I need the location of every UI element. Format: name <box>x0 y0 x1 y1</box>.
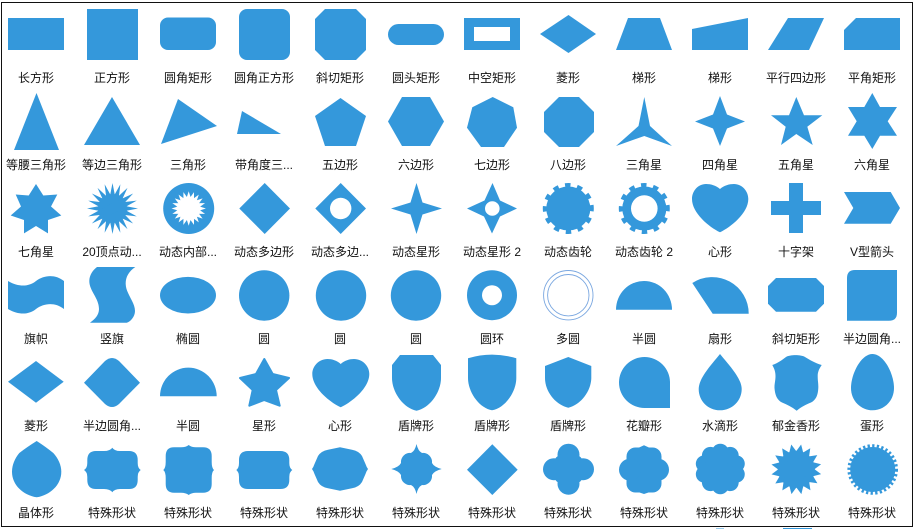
shape: V型箭头 <box>844 192 900 259</box>
shape: 特殊形状 7 <box>543 444 594 520</box>
shape: 平行四边形: 平行四边形 <box>766 71 826 85</box>
shape: 六边形: 六边形 <box>398 158 434 172</box>
shape: 花瓣形 <box>619 357 670 433</box>
shape: 盾牌形 3 <box>545 357 591 433</box>
shape: 菱形 2: 菱形 <box>24 419 48 433</box>
shape: 20顶点动态星形: 20顶点动... <box>82 245 142 259</box>
shape: 动态多边形 <box>234 183 294 259</box>
shape: 动态齿轮 2 <box>615 186 673 259</box>
shape: 盾牌形 2: 盾牌形 <box>474 419 510 433</box>
shape: 椭圆: 椭圆 <box>176 331 200 346</box>
shape: 特殊形状 8 <box>619 445 669 520</box>
shape: 动态星形 2 <box>463 183 521 259</box>
shape: 水滴形 <box>699 354 742 433</box>
shape: 斜切矩形 2: 斜切矩形 <box>772 332 820 346</box>
shape: 扇形 <box>692 277 749 346</box>
shape: 平行四边形 <box>766 18 826 85</box>
shape: 半边圆角菱形 <box>83 358 141 433</box>
shape: 动态内部星形: 动态内部... <box>159 244 217 259</box>
shape: 特殊形状 1 <box>84 448 141 520</box>
shape: 圆 2: 圆 <box>334 332 346 346</box>
shape: 八边形: 八边形 <box>550 158 586 172</box>
shape: 等边三角形: 等边三角形 <box>82 158 142 172</box>
shape: 半圆: 半圆 <box>632 332 656 346</box>
shape: 中空矩形: 中空矩形 <box>468 70 516 85</box>
shape: 圆 1: 圆 <box>258 332 270 346</box>
shape: 盾牌形 1 <box>392 355 441 433</box>
shape: 椭圆 <box>160 277 216 346</box>
shape: 多圆 <box>544 270 593 346</box>
shape: 梯形 2: 梯形 <box>708 71 732 85</box>
shape: 竖旗 <box>89 267 135 346</box>
shape: 等腰三角形: 等腰三角形 <box>6 158 66 172</box>
shape: 特殊形状 4 <box>312 447 368 520</box>
shape: 半边圆角矩形: 半边圆角... <box>843 332 901 346</box>
shape: 八边形 <box>544 97 594 172</box>
shape: 特殊形状 2 <box>163 445 214 520</box>
shape: 十字架 <box>771 183 821 259</box>
shape: 斜切矩形: 斜切矩形 <box>316 71 364 85</box>
shape: 动态星形: 动态星形 <box>392 245 440 259</box>
shape: 斜切矩形 2 <box>768 278 824 346</box>
shape: 动态星形 <box>391 183 442 259</box>
shape: 五角星 <box>771 97 822 172</box>
shape: 三角形: 三角形 <box>170 158 206 172</box>
shape: 半边圆角矩形 <box>843 270 901 346</box>
shape: 七边形 <box>467 97 517 172</box>
shape: 特殊形状 9: 特殊形状 <box>696 505 744 520</box>
shape: 圆 3 <box>391 270 441 346</box>
shape: 正方形: 正方形 <box>94 70 130 85</box>
shape: 梯形 <box>616 18 672 85</box>
shape: 特殊形状 3 <box>236 451 292 520</box>
shape: 三角形 <box>161 99 217 172</box>
shape: 蛋形: 蛋形 <box>860 419 884 433</box>
shape: 郁金香形 <box>772 355 822 433</box>
shape: 圆头矩形 <box>388 24 444 85</box>
shape: 斜切矩形 <box>315 9 366 85</box>
shape: 圆环: 圆环 <box>480 332 504 346</box>
shape: 动态多边形 2 <box>311 183 369 259</box>
shape: 星形: 星形 <box>252 419 276 433</box>
shape: 盾牌形 3: 盾牌形 <box>550 419 586 433</box>
shape: 圆角矩形 <box>160 18 216 85</box>
shape: 水滴形: 水滴形 <box>702 418 738 433</box>
shape: 五边形 <box>315 98 366 172</box>
shape: 圆 2 <box>316 270 366 346</box>
shape: 五角星: 五角星 <box>778 158 814 172</box>
shape: 郁金香形: 郁金香形 <box>772 418 820 433</box>
shape: 盾牌形 1: 盾牌形 <box>398 419 434 433</box>
shape: 特殊形状 2: 特殊形状 <box>164 505 212 520</box>
shape: 动态内部星形 <box>159 183 217 259</box>
shape: 等边三角形 <box>82 97 142 172</box>
shape: 圆角正方形: 圆角正方形 <box>234 70 294 85</box>
shape: 正方形 <box>87 9 138 85</box>
shape: 圆角矩形: 圆角矩形 <box>164 71 212 85</box>
shape: 晶体形: 晶体形 <box>18 506 54 520</box>
shape: 动态齿轮 2: 动态齿轮 2 <box>615 245 673 259</box>
shape: 四角星 <box>695 96 745 172</box>
shape: 半圆 2 <box>160 368 217 433</box>
shape: 旗帜: 旗帜 <box>24 331 48 346</box>
shape: 半边圆角菱形: 半边圆角... <box>83 419 141 433</box>
shape: 动态星形 2: 动态星形 2 <box>463 245 521 259</box>
shape: 五边形: 五边形 <box>322 158 358 172</box>
shape: 心形 2 <box>312 359 369 433</box>
shape: 特殊形状 9 <box>694 444 747 520</box>
shape: 半圆 2: 半圆 <box>176 419 200 433</box>
shape: 动态多边形 2: 动态多边... <box>311 245 369 259</box>
shape: 四角星: 四角星 <box>702 158 738 172</box>
shape: 特殊形状 11 <box>848 446 896 520</box>
shape: 七边形: 七边形 <box>474 158 510 172</box>
shape: 20顶点动态星形 <box>82 183 142 259</box>
shape: 平角矩形: 平角矩形 <box>848 71 896 85</box>
shape: 菱形 <box>540 15 596 85</box>
shape: 旗帜 <box>8 276 64 346</box>
shape: 动态多边形: 动态多边形 <box>234 245 294 259</box>
shape: 特殊形状 11: 特殊形状 <box>848 505 896 520</box>
shape: 圆头矩形: 圆头矩形 <box>392 71 440 85</box>
shape: 半圆 <box>616 281 672 346</box>
shape: 特殊形状 10: 特殊形状 <box>772 505 820 520</box>
shape: 六边形 <box>388 97 444 172</box>
shape: 平角矩形 <box>844 18 900 85</box>
shape: 星形 <box>240 359 289 433</box>
shape: 特殊形状 4: 特殊形状 <box>316 505 364 520</box>
cropped shapes below the frame <box>716 528 812 529</box>
shape: 花瓣形: 花瓣形 <box>626 418 662 433</box>
shape: 带角度三角形: 带角度三... <box>235 157 293 172</box>
shape: 三角星: 三角星 <box>626 158 662 172</box>
shape: 七角星 <box>11 184 61 259</box>
shape: 特殊形状 7: 特殊形状 <box>544 505 592 520</box>
shape: V型箭头: V型箭头 <box>850 244 894 259</box>
shape: 晶体形 <box>12 441 61 520</box>
shape: 带角度三角形 <box>235 111 293 172</box>
shape: 十字架: 十字架 <box>778 244 814 259</box>
shape: 圆 3: 圆 <box>410 332 422 346</box>
shape: 动态齿轮 <box>544 186 592 259</box>
shape: 梯形 2 <box>692 18 748 85</box>
shape: 中空矩形 <box>464 18 520 85</box>
shape: 特殊形状 5 <box>391 444 442 520</box>
shape: 六角星 <box>848 93 897 172</box>
shape: 蛋形 <box>851 354 894 433</box>
shape: 长方形 <box>8 18 64 85</box>
shape: 梯形: 梯形 <box>632 71 656 85</box>
shape: 特殊形状 5: 特殊形状 <box>392 505 440 520</box>
shape: 菱形 2 <box>8 361 64 433</box>
shape: 特殊形状 6 <box>467 444 518 520</box>
shape: 动态齿轮: 动态齿轮 <box>544 245 592 259</box>
shape: 三角星 <box>616 97 672 172</box>
shape: 圆 1 <box>239 270 289 346</box>
shape: 菱形: 菱形 <box>556 71 580 85</box>
shape: 扇形: 扇形 <box>708 331 732 346</box>
shape: 心形 <box>692 184 748 259</box>
shape: 竖旗: 竖旗 <box>100 331 124 346</box>
shape: 长方形: 长方形 <box>18 70 54 85</box>
shape: 心形 2: 心形 <box>328 419 352 433</box>
shape: 等腰三角形 <box>6 93 66 172</box>
shape: 圆环 <box>467 270 517 346</box>
shape: 特殊形状 1: 特殊形状 <box>88 505 136 520</box>
shape: 特殊形状 8: 特殊形状 <box>620 505 668 520</box>
shape: 圆角正方形 <box>234 9 294 85</box>
shape: 七角星: 七角星 <box>18 245 54 259</box>
shape: 特殊形状 3: 特殊形状 <box>240 505 288 520</box>
shape: 多圆: 多圆 <box>556 332 580 346</box>
shape: 六角星: 六角星 <box>854 158 890 172</box>
shape: 特殊形状 6: 特殊形状 <box>468 505 516 520</box>
shape: 盾牌形 2 <box>468 355 516 433</box>
shape: 心形: 心形 <box>708 245 732 259</box>
shape: 特殊形状 10 <box>769 442 824 520</box>
